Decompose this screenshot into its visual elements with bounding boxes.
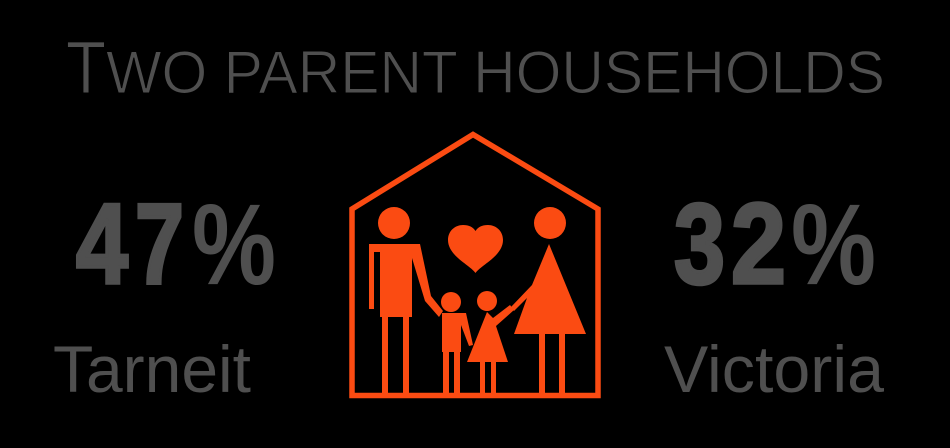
title: T — [66, 26, 106, 109]
house outline — [352, 134, 598, 396]
statistic: Tarneit 47%: Tarneit — [53, 332, 251, 406]
statistic: Tarneit 47% — [53, 181, 276, 406]
figure: father — [369, 207, 443, 395]
statistic: Victoria 32% — [664, 181, 884, 406]
statistic: Victoria 32%: % — [791, 181, 876, 309]
figure: mother — [511, 207, 586, 395]
statistic: Victoria 32%: Victoria — [664, 332, 884, 406]
title: WO PARENT HOUSEHOLDS — [106, 39, 885, 106]
statistic: Victoria 32%: 3 — [674, 181, 725, 308]
figure: girl — [467, 291, 514, 395]
icon: family in house — [352, 134, 598, 396]
figure: boy — [441, 292, 473, 395]
statistic: Tarneit 47%: % — [192, 181, 276, 309]
statistic: Victoria 32%: 2 — [731, 181, 786, 308]
statistic: Tarneit 47%: 7 — [135, 181, 184, 308]
statistic: Tarneit 47%: 4 — [76, 181, 128, 308]
icon: heart — [448, 225, 503, 273]
